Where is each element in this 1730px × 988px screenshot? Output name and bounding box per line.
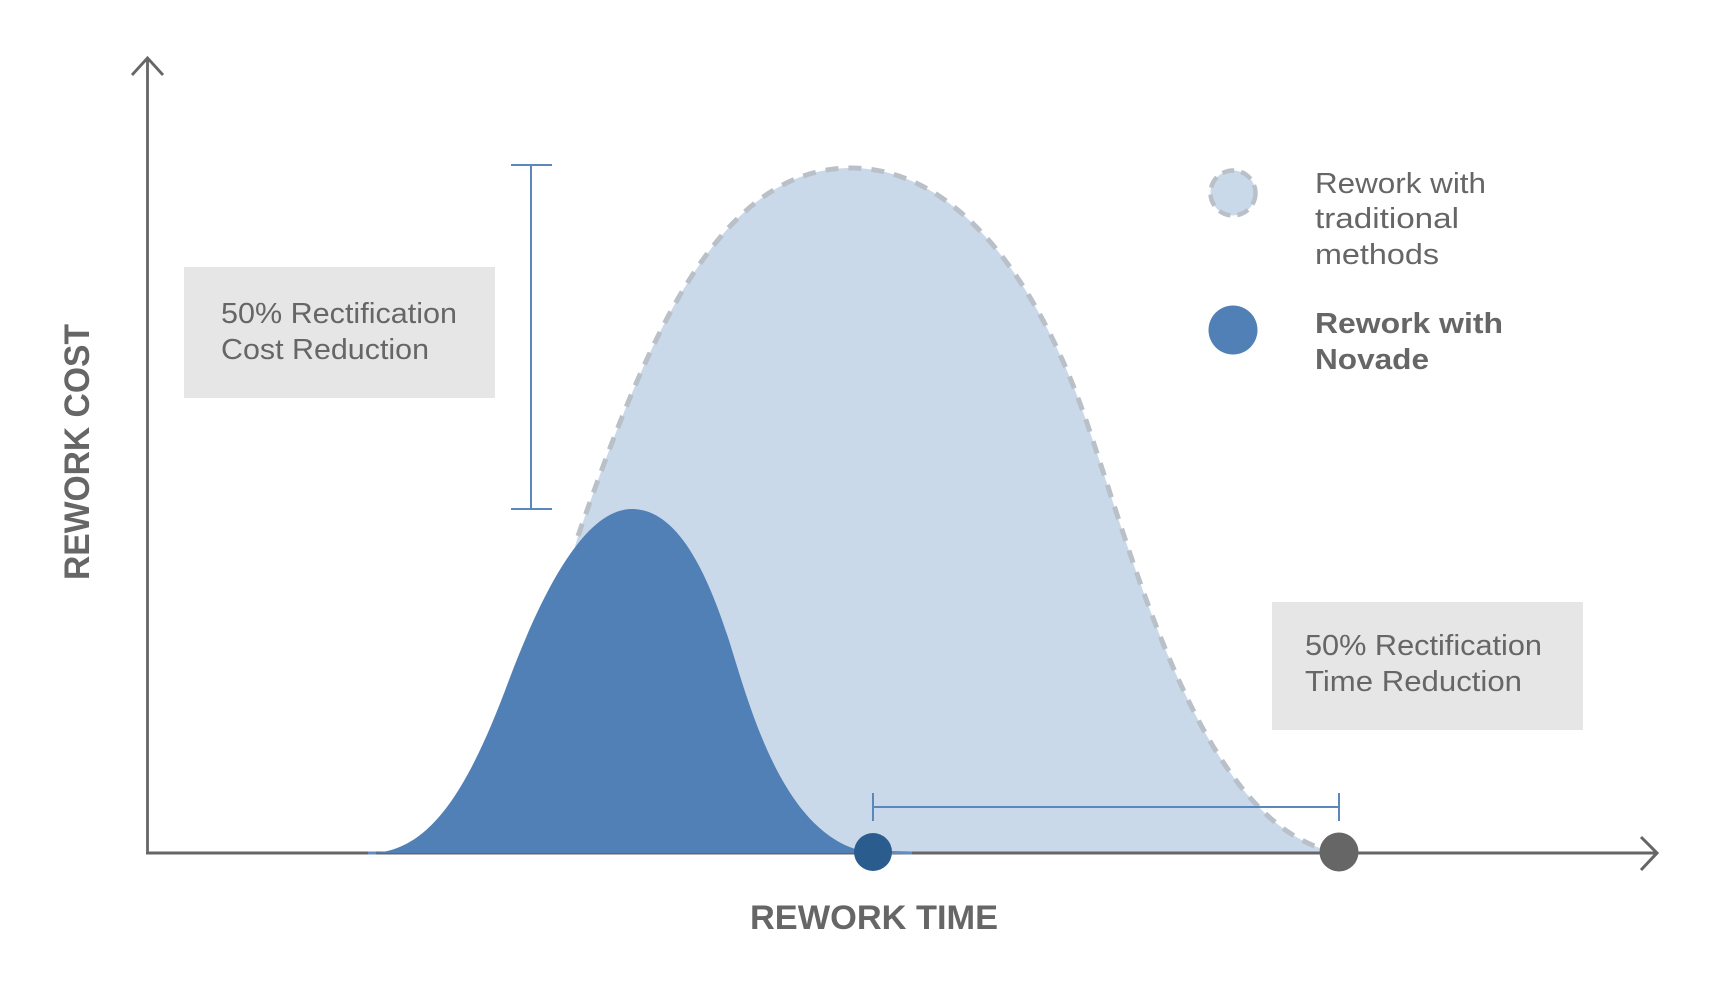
legend: traditional methods: methods xyxy=(1315,239,1439,271)
area: rework with traditional methods xyxy=(560,168,1339,853)
callout: cost reduction xyxy=(184,267,495,398)
callout: cost reduction: 50% Rectification xyxy=(221,298,457,330)
axis blue stubs xyxy=(368,852,912,853)
legend: Novade xyxy=(1208,306,1503,376)
marker: Novade end point xyxy=(854,833,892,871)
x axis title: REWORK TIME xyxy=(750,899,998,937)
y axis with arrow xyxy=(132,58,163,853)
area: rework with Novade xyxy=(372,509,873,853)
x axis with arrow xyxy=(146,837,1657,870)
marker: traditional end point xyxy=(1320,832,1358,872)
legend: traditional methods xyxy=(1210,168,1486,271)
callout: time reduction xyxy=(1272,602,1583,730)
callout: time reduction: Time Reduction xyxy=(1305,666,1522,698)
time reduction bracket xyxy=(873,793,1339,821)
legend: Novade: Rework with xyxy=(1315,308,1503,340)
legend: traditional methods: Rework with xyxy=(1315,168,1486,200)
callout: time reduction: 50% Rectification xyxy=(1305,630,1542,662)
legend: traditional methods: traditional xyxy=(1315,203,1459,235)
callout: cost reduction: Cost Reduction xyxy=(221,334,429,366)
y axis title: REWORK COST xyxy=(58,324,97,580)
legend: Novade: Novade xyxy=(1315,344,1429,376)
cost reduction bracket xyxy=(511,165,552,509)
